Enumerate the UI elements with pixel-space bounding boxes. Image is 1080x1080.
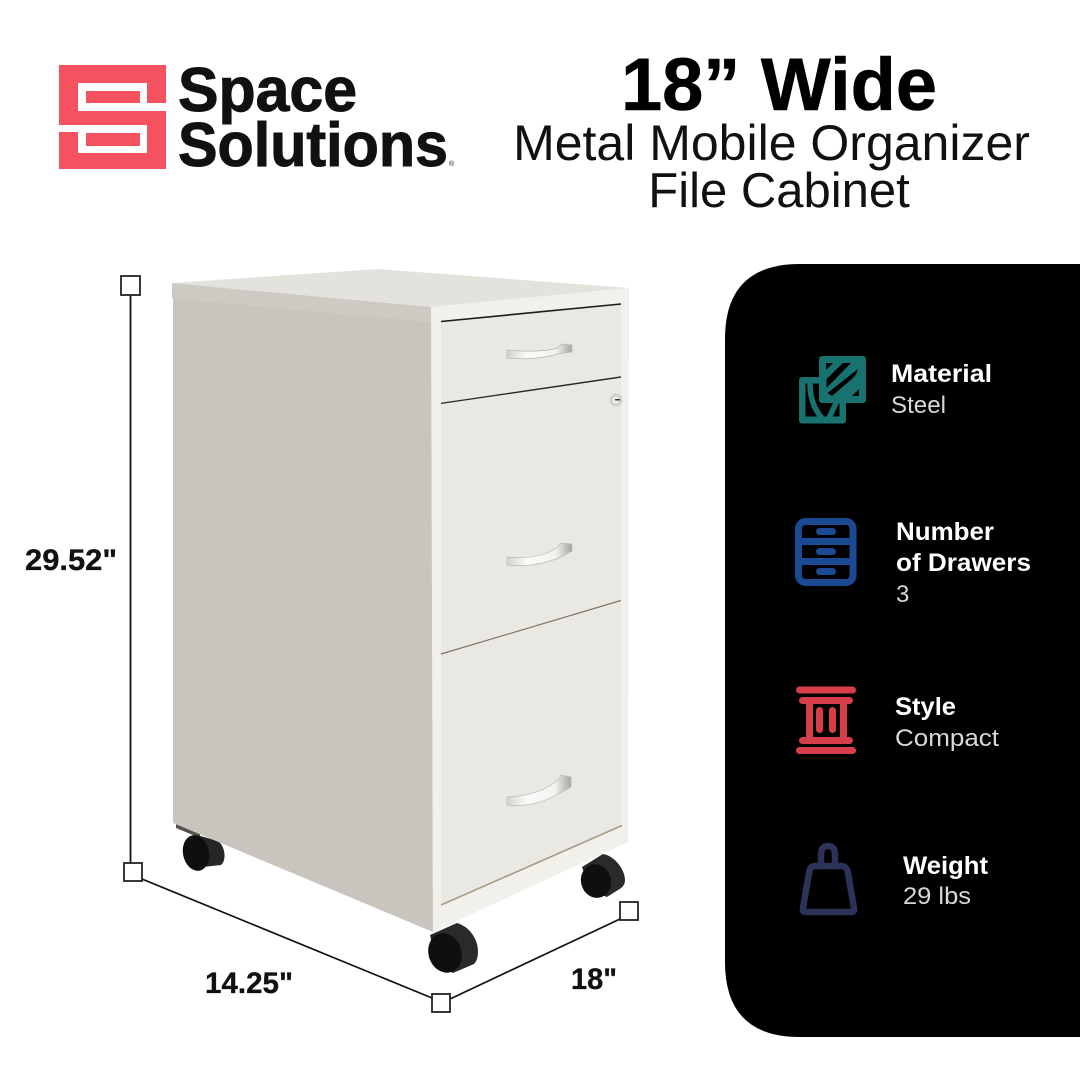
front caster: [423, 923, 478, 977]
dimension: width 18": 18": [571, 963, 617, 996]
label: Weight: Weight: [903, 852, 989, 880]
value: Compact: Compact: [895, 725, 999, 752]
side panel: [173, 298, 433, 932]
label: Style: Style: [895, 693, 956, 721]
bottom gap: [441, 826, 622, 905]
dimension: height 29.52": 29.52": [25, 544, 117, 577]
subtitle line 1: Metal Mobile Organizer: [513, 115, 1030, 171]
spec: style: [796, 686, 999, 754]
logo wordmark: Space: [178, 56, 357, 125]
spec: weight: [803, 846, 989, 912]
logo wordmark: [178, 56, 455, 180]
title: [513, 43, 1030, 218]
value: 29 lbs: 29 lbs: [903, 883, 971, 910]
drawer 3: [441, 602, 622, 904]
logo mark: [59, 65, 166, 169]
icon: material swatches: [799, 356, 866, 424]
icon: column: [796, 686, 856, 754]
icon: drawers: [798, 522, 854, 582]
label: Number of Drawers: of Drawers: [896, 549, 1031, 577]
top lip side: [172, 283, 431, 322]
icon: weight: [803, 846, 854, 912]
spec: number of drawers: [798, 518, 1031, 608]
title line: 18” Wide: 18” Wide: [621, 43, 937, 126]
lock: [610, 394, 622, 406]
logo: Space Solutions: [59, 56, 455, 180]
dimension: depth 14.25": [142, 879, 450, 1012]
dimension: height 29.52": [25, 276, 142, 881]
rear caster: [176, 824, 225, 873]
label: Number of Drawers: Number: [896, 518, 994, 546]
value: 3: 3: [896, 581, 909, 608]
logo wordmark: ®: [449, 160, 455, 168]
front frame: [431, 288, 629, 932]
drawer 1: [441, 304, 621, 404]
label: Material: Material: [891, 360, 992, 388]
drawer 2: [441, 378, 621, 654]
subtitle line 2: File Cabinet: [648, 164, 910, 218]
product: file cabinet: [172, 269, 629, 977]
panel background: [725, 264, 1080, 1037]
handle: bottom drawer: [507, 775, 571, 806]
handle: middle drawer: [507, 543, 572, 566]
panel: specifications: [725, 264, 1080, 1037]
logo wordmark: Solutions: [178, 111, 448, 180]
spec: material: [799, 356, 992, 424]
dimension: width 18": [450, 902, 638, 999]
dimension: depth 14.25": 14.25": [205, 967, 293, 1000]
handle: top drawer: [507, 344, 572, 359]
value: Steel: Steel: [891, 392, 946, 419]
cabinet top: [172, 269, 629, 307]
right caster: [577, 854, 625, 901]
